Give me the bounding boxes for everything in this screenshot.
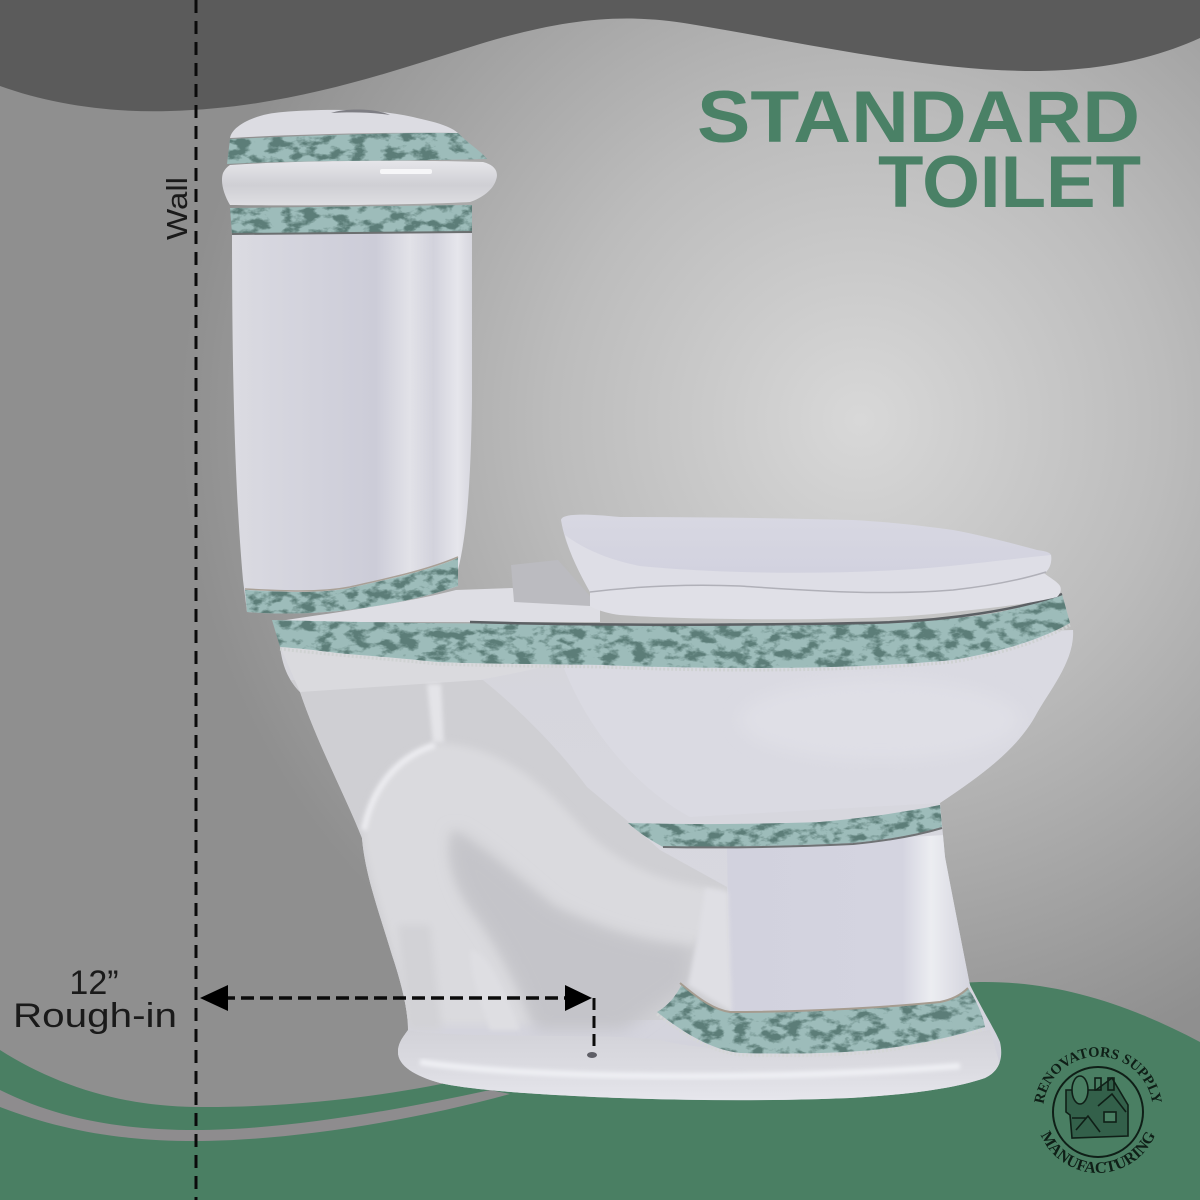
pedestal left bright strip <box>688 888 732 1012</box>
wall label: Wall <box>162 177 194 240</box>
flush button <box>331 109 390 115</box>
rough-in label: Rough-in <box>13 997 177 1035</box>
tank lid marble band <box>227 133 487 164</box>
bright upright strip <box>427 684 444 743</box>
drain bolt hole <box>587 1052 597 1058</box>
bottom green wave <box>0 982 1200 1200</box>
manufacturer logo <box>1034 1047 1162 1174</box>
rough-in dimension arrow <box>200 985 594 1048</box>
rough-in label <box>13 964 177 1035</box>
toilet seat ring <box>590 570 1061 619</box>
tank lid rim <box>222 161 497 205</box>
toilet seat lid <box>561 515 1051 593</box>
top dark wave band <box>0 0 1200 111</box>
trap inner hollow <box>451 830 690 1030</box>
title: STANDARD <box>697 77 1140 158</box>
gray stripe in green wave <box>0 1090 510 1141</box>
bowl highlight <box>983 716 1035 772</box>
trapway tube <box>366 746 703 1020</box>
logo house <box>1066 1076 1128 1138</box>
title: TOILET <box>878 142 1141 223</box>
base flange <box>380 1030 1010 1100</box>
seat hinge <box>511 560 590 606</box>
rear wall <box>280 680 730 1020</box>
tank bottom marble band <box>245 558 458 614</box>
rim underside <box>295 680 474 692</box>
tank lid dome <box>230 110 458 138</box>
wall dashed line <box>194 0 198 1200</box>
tank support deck <box>272 588 600 622</box>
toilet illustration <box>222 109 1073 1100</box>
bowl rim marble band <box>272 594 1070 668</box>
tank upper marble band <box>230 205 472 234</box>
rough-in label: 12” <box>69 964 119 1002</box>
base front highlight <box>420 1062 960 1076</box>
bowl lower glow <box>740 680 1020 760</box>
seat edge shadow <box>590 572 1046 593</box>
body detail shading <box>280 630 1073 1100</box>
title <box>697 77 1141 223</box>
logo top text: RENOVATORS SUPPLY <box>1034 1047 1162 1104</box>
pedestal <box>913 835 970 1003</box>
logo ring <box>1053 1067 1143 1157</box>
logo bottom text: MANUFACTURING <box>1040 1130 1154 1174</box>
tube outer highlight <box>364 745 435 830</box>
front legs <box>408 934 432 1022</box>
lid front bevel <box>565 535 1051 593</box>
foot marble band <box>657 984 985 1054</box>
bowl and trapway body <box>280 630 1073 1100</box>
toilet tank body <box>232 230 472 614</box>
pedestal marble band <box>628 805 942 847</box>
